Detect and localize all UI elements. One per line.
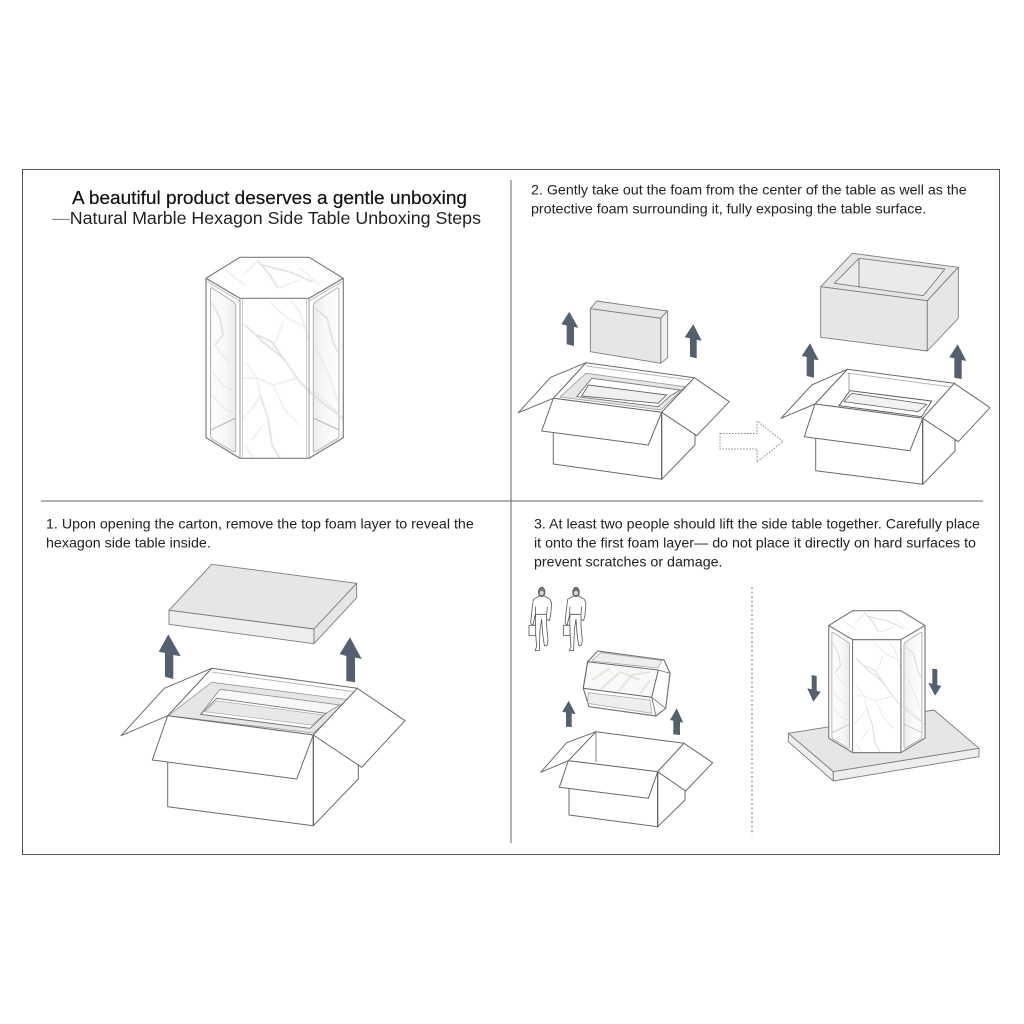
panel: title and product [52,187,481,458]
subtitle: —Natural Marble Hexagon Side Table Unboxing Steps [52,208,481,228]
arrow up left [561,312,578,346]
vertical divider [510,180,512,843]
arrow up right [685,324,702,358]
arrow up right [670,708,683,735]
dashed separator [751,587,753,835]
step 2 text: protective foam surrounding it, fully exposing the table surface. [531,202,926,218]
bottom foam slab [788,710,979,781]
open carton with centre foam [518,363,729,479]
panel: step 2 [518,182,990,484]
tilted table [583,651,670,716]
table on foam [829,611,925,753]
horizontal divider [41,500,983,502]
step 3 text: it onto the first foam layer— do not place it directly on hard surfaces to [534,536,976,552]
panel: step 3 [529,516,980,835]
step 2 text: 2. Gently take out the foam from the center of the table as well as the [531,182,967,198]
person one [529,587,552,651]
arrow down left [807,675,821,702]
hexagon marble table [206,257,343,458]
empty open carton [541,732,713,827]
arrow up left second [802,343,819,378]
arrow up left [562,701,576,727]
top foam layer [169,564,357,644]
arrow up left [159,634,181,679]
step 1 text: 1. Upon opening the carton, remove the top foam layer to reveal the [46,516,474,532]
step 3 text: 3. At least two people should lift the side table together. Carefully place [534,516,980,532]
two people [529,587,586,651]
person two [563,587,586,651]
foam ring [821,253,958,351]
arrow down right [928,669,941,696]
outer frame [22,170,1000,854]
arrow up right [340,637,362,682]
open carton with foam [121,668,405,826]
title: A beautiful product deserves a gentle unboxing [72,187,467,208]
arrow up right second [949,344,966,379]
panel: step 1 [46,516,474,826]
step 1 text: hexagon side table inside. [46,536,211,552]
foam block [590,301,668,363]
open carton with table [781,369,990,484]
step 3 text: prevent scratches or damage. [534,554,723,570]
dotted arrow to next [720,421,783,462]
